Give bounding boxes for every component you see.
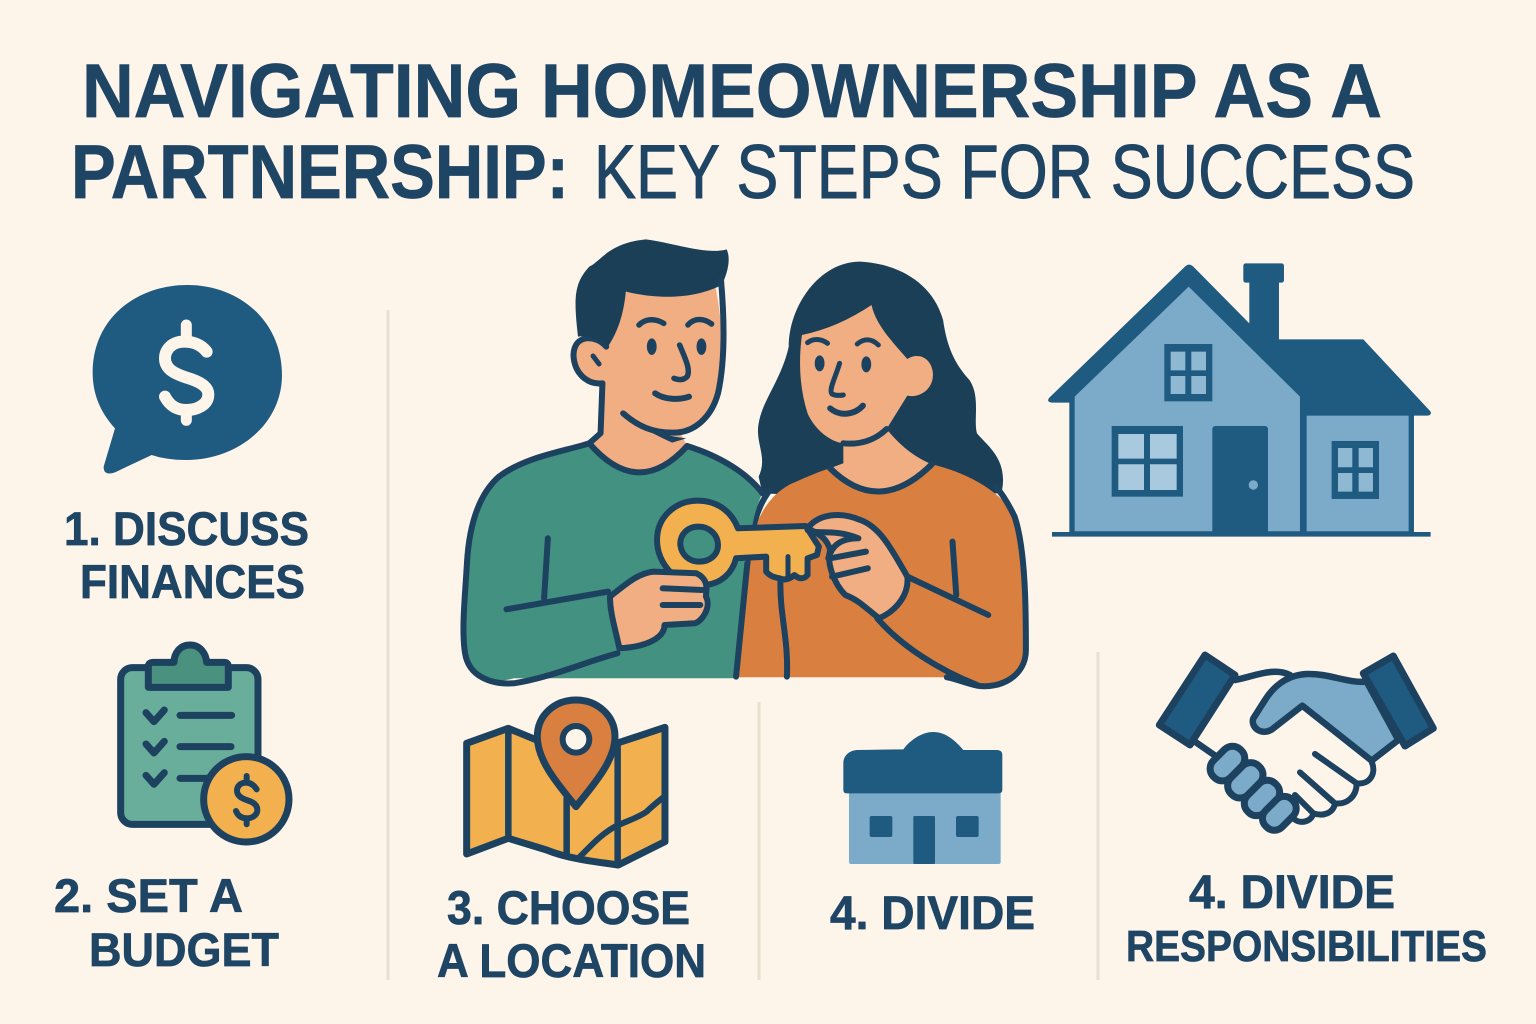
label: step 2 set a budget [54,869,279,976]
title: PARTNERSHIP: [71,130,569,215]
label: step 1 discuss finances [64,502,309,608]
man hand [610,572,708,648]
label: step 3 choose a location [437,881,706,987]
label: step 1 discuss finances: 1. DISCUSS [64,502,309,555]
icon: clipboard checklist with coin [121,645,289,842]
woman neck and face [800,305,933,492]
label: step 1 discuss finances: FINANCES [80,555,305,608]
man hair [576,239,729,347]
sweater divider folds [736,563,747,677]
label: step 4 divide responsibilities [1126,865,1487,971]
label: step 4 divide responsibilities: 4. DIVIDE [1189,865,1395,918]
label: step 4 divide: 4. DIVIDE [830,886,1035,939]
man neck and face [573,287,722,472]
man sweater [463,443,762,681]
woman hand [808,515,908,618]
icon: blue house with chimney [1048,263,1431,537]
illustration: couple holding key [463,239,1026,686]
label: step 3 choose a location: A LOCATION [437,934,706,987]
icon: speech bubble with dollar sign [93,285,282,473]
label: step 4 divide responsibilities: RESPONSIBILITIES [1126,922,1487,971]
label: step 3 choose a location: 3. CHOOSE [447,881,690,934]
icon: small house [843,732,1002,864]
title [71,49,1415,215]
icon: folded map with location pin [467,700,665,865]
label: step 2 set a budget: BUDGET [89,923,279,976]
woman sweater [736,464,1026,686]
icon: handshake [1159,655,1433,835]
woman hair [758,262,1003,497]
title: NAVIGATING HOMEOWNERSHIP AS A [82,49,1382,134]
key [657,501,819,585]
label: step 2 set a budget: 2. SET A [54,869,243,922]
